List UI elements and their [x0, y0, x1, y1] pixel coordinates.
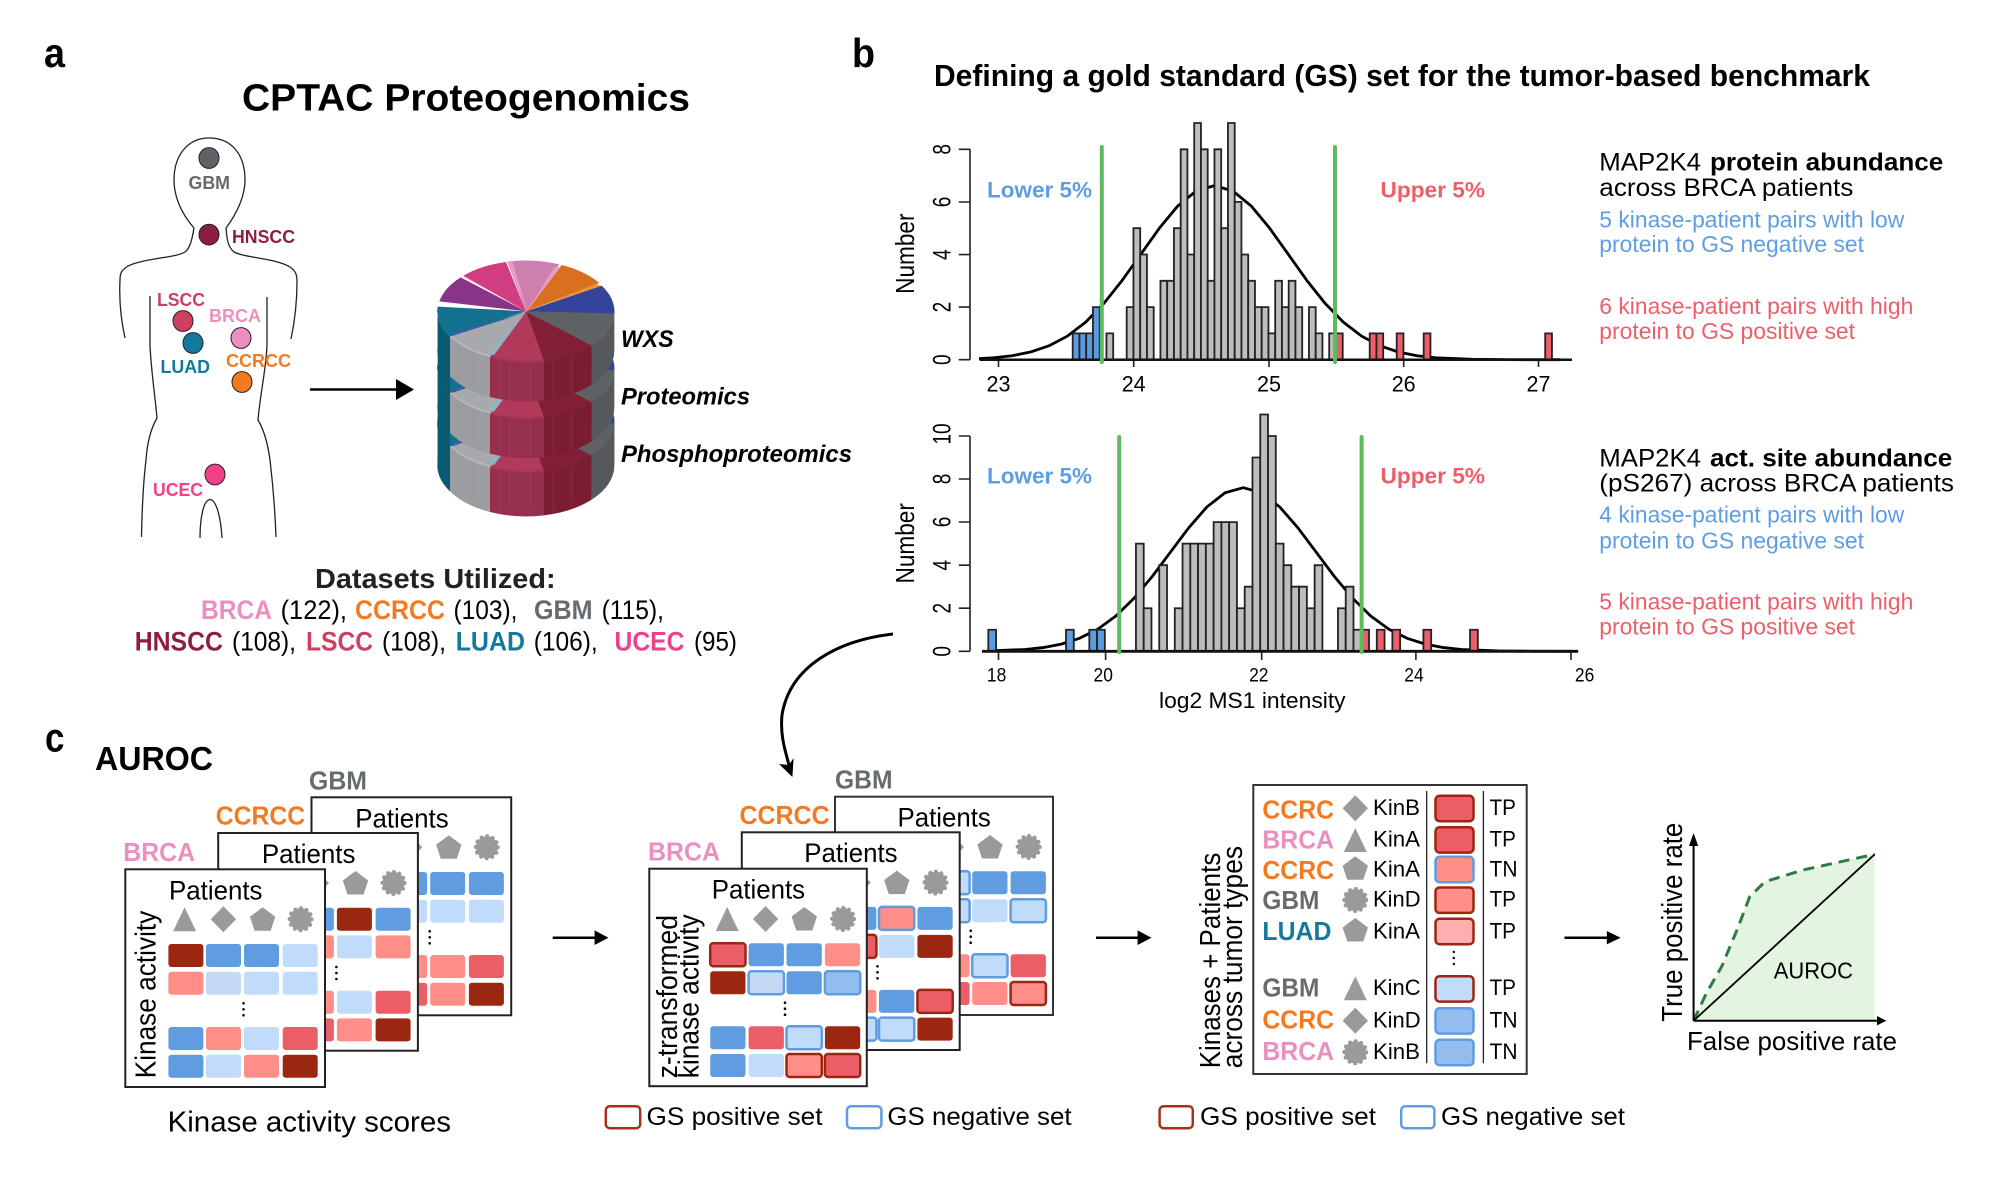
description: protein abundance: across BRCA patients	[1599, 174, 1853, 202]
histogram: activation site abundance	[892, 414, 1594, 713]
tumor type column: GBM	[1262, 885, 1319, 915]
kinase names column: KinA	[1373, 827, 1420, 852]
kinase names column: KinA	[1373, 918, 1420, 943]
datasets utilized text: (103),	[454, 595, 518, 625]
tumor label BRCA: BRCA	[123, 837, 195, 867]
TP / TN column: TN	[1490, 857, 1518, 882]
normal curve top	[979, 186, 1560, 360]
TP / TN column: TN	[1490, 1007, 1518, 1032]
description: protein abundance	[1599, 148, 1943, 344]
ROC curve chart	[1657, 823, 1897, 1056]
ROC dashed curve	[1694, 854, 1875, 1021]
body outline	[120, 138, 297, 538]
TP / TN column: TP	[1490, 795, 1516, 820]
TP / TN column: TP	[1490, 827, 1516, 852]
datasets utilized text: Datasets Utilized:	[315, 563, 556, 594]
datasets utilized text: (108),	[382, 626, 446, 656]
description: protein abundance: protein to GS negative set	[1599, 231, 1865, 257]
y ticks and labels bottom: 8	[928, 474, 956, 484]
rotated label: kinases and patients: Kinases + Patients	[1195, 853, 1227, 1068]
x tick labels top: 24	[1122, 372, 1146, 397]
axes top	[959, 149, 1572, 367]
tumor type column	[1262, 794, 1334, 1066]
card stack: z-transformed kinase activity	[648, 765, 1053, 1086]
percentile lines top	[1102, 147, 1335, 362]
site: BRCA	[209, 305, 261, 348]
kinase names column: KinA	[1373, 857, 1420, 882]
data layer labels: WXS	[621, 326, 674, 353]
site: LUAD: LUAD	[160, 356, 210, 377]
datasets utilized text: LSCC	[306, 626, 373, 656]
axes bottom	[959, 436, 1571, 660]
card CCRCC z-scores: Patients	[804, 838, 898, 868]
x axis title: log2 MS1 intensity	[1159, 688, 1346, 713]
card CCRCC	[218, 833, 418, 1051]
card BRCA: Kinase activity	[131, 910, 163, 1078]
rotated label: kinases and patients	[1195, 846, 1249, 1068]
legend: GS sets, middle: GS negative set	[887, 1103, 1072, 1131]
description: protein abundance: 6 kinase-patient pairs with high	[1599, 293, 1913, 319]
description: protein abundance: protein abundance	[1710, 148, 1943, 176]
site: LSCC	[157, 289, 205, 331]
tumor label CCRCC: CCRCC	[740, 800, 830, 830]
panel a title: CPTAC Proteogenomics	[242, 78, 690, 120]
legend: GS sets, middle: GS positive set	[646, 1103, 823, 1131]
site: HNSCC	[199, 224, 295, 247]
kinase names column: KinB	[1373, 1039, 1420, 1064]
lower and upper labels bottom: Upper 5%	[1380, 463, 1485, 488]
datasets utilized text: (95)	[694, 626, 737, 656]
TP / TN column	[1490, 795, 1518, 1064]
rotated label: kinases and patients: across tumor types	[1217, 846, 1249, 1068]
description: activation site abundance: 4 kinase-patient pairs with low	[1599, 502, 1905, 528]
site: BRCA: BRCA	[209, 305, 261, 326]
x tick labels bottom: 20	[1094, 666, 1113, 687]
kinase names column: KinD	[1373, 887, 1421, 912]
panel label a: a	[44, 30, 66, 76]
histogram bars bottom	[988, 414, 1478, 651]
datasets utilized text: (108),	[232, 626, 296, 656]
ranked table panel	[1253, 785, 1527, 1074]
datasets utilized text: CCRCC	[355, 595, 445, 625]
datasets utilized text: LUAD	[456, 626, 525, 656]
percentile lines bottom	[1119, 437, 1362, 652]
tumor label BRCA: BRCA	[648, 836, 720, 866]
site: GBM: GBM	[188, 172, 230, 193]
lower and upper labels top: Upper 5%	[1380, 178, 1485, 203]
x tick labels top: 23	[986, 372, 1010, 397]
tumor type column: CCRC	[1262, 1004, 1334, 1034]
diagonal reference line	[1694, 854, 1875, 1021]
body diagram with tumor sites	[120, 138, 297, 538]
x tick labels top	[986, 372, 1550, 397]
card CCRCC: Patients	[262, 839, 355, 869]
y ticks and labels bottom: 0	[928, 646, 956, 657]
kinase names column: KinD	[1373, 1007, 1421, 1032]
x tick labels top: 27	[1526, 372, 1550, 397]
y axis label: True positive rate	[1657, 823, 1689, 1022]
site: UCEC	[153, 464, 225, 500]
y ticks and labels bottom: 10	[928, 423, 956, 445]
y ticks and labels top: 6	[928, 197, 956, 207]
TP / TN column: TP	[1490, 887, 1516, 912]
description: activation site abundance: (pS267) across BRCA patients	[1599, 470, 1954, 498]
tumor type column: CCRC	[1262, 855, 1334, 885]
arrow: scores to z-transformed	[553, 930, 608, 945]
site: LUAD	[160, 333, 210, 377]
lower and upper labels bottom	[987, 463, 1485, 488]
legend: GS sets, right: GS positive set	[1200, 1103, 1376, 1131]
ROC axes	[1689, 833, 1886, 1025]
tumor label GBM: GBM	[309, 765, 367, 795]
data stack cylinder	[437, 261, 614, 516]
histogram bars top	[1073, 123, 1552, 360]
description: protein abundance: 5 kinase-patient pairs with low	[1599, 206, 1905, 232]
TP / TN column: TP	[1490, 975, 1516, 1000]
y ticks and labels bottom: 4	[928, 560, 956, 570]
data layer labels: Proteomics	[621, 384, 750, 411]
datasets utilized text: (115),	[602, 595, 664, 625]
site: CCRCC	[226, 350, 291, 392]
y ticks and labels top: Number	[892, 214, 920, 294]
site: GBM	[188, 148, 230, 193]
panel b title: Defining a gold standard (GS) set for the tumor-based benchmark	[934, 59, 1870, 93]
card GBM z-scores	[835, 797, 1053, 1015]
panel label b: b	[852, 30, 875, 76]
y ticks and labels bottom: Number	[892, 503, 920, 583]
arrow: z-transformed to ranked table	[1096, 930, 1152, 945]
card BRCA	[125, 869, 325, 1087]
AUROC label: AUROC	[1774, 957, 1853, 983]
tumor type column: LUAD	[1262, 916, 1331, 946]
site: CCRCC: CCRCC	[226, 350, 291, 371]
data layer labels: Phosphoproteomics	[621, 441, 852, 468]
panel label c: c	[45, 715, 64, 761]
AUROC area	[1694, 854, 1875, 1021]
data layer labels	[621, 326, 852, 468]
y ticks and labels top: 8	[928, 144, 956, 155]
card GBM: Patients	[355, 803, 449, 833]
tumor label GBM: GBM	[835, 765, 892, 795]
patient shape icons column	[1343, 795, 1368, 1063]
datasets utilized text: HNSCC	[135, 626, 223, 656]
curved arrow: histogram to z-transformed cards	[779, 634, 893, 777]
x tick labels top: 26	[1392, 372, 1416, 397]
card BRCA z-scores: z-transformed	[652, 915, 684, 1078]
y ticks and labels top: 2	[928, 302, 956, 312]
caption: kinase activity scores: Kinase activity scores	[168, 1107, 451, 1139]
kinase names column: KinB	[1373, 795, 1420, 820]
y ticks and labels top	[892, 144, 956, 365]
legend: GS sets, middle	[606, 1103, 1072, 1131]
TP / TN column: TP	[1490, 918, 1516, 943]
x tick labels bottom	[987, 666, 1594, 687]
card GBM z-scores: Patients	[898, 802, 991, 832]
tumor type column: GBM	[1262, 973, 1319, 1003]
histogram: protein abundance	[892, 123, 1572, 397]
lower and upper labels bottom: Lower 5%	[987, 463, 1092, 488]
card CCRCC z-scores	[742, 832, 960, 1050]
lower and upper labels top	[987, 178, 1485, 203]
tumor type column: BRCA	[1262, 824, 1334, 854]
site: UCEC: UCEC	[153, 479, 203, 500]
x tick labels bottom: 26	[1575, 666, 1594, 687]
tumor label CCRCC: CCRCC	[216, 801, 305, 831]
tumor type column: CCRC	[1262, 794, 1334, 824]
card BRCA z-scores: Patients	[712, 874, 805, 904]
legend: GS sets, right	[1160, 1103, 1625, 1131]
site: HNSCC: HNSCC	[232, 226, 295, 247]
description: protein abundance: protein to GS positive set	[1599, 318, 1856, 344]
y ticks and labels bottom	[892, 423, 956, 657]
x tick labels bottom: 24	[1404, 666, 1424, 687]
x tick labels bottom: 18	[987, 666, 1006, 687]
tumor type column: BRCA	[1262, 1036, 1334, 1066]
description: activation site abundance	[1599, 444, 1954, 640]
datasets utilized text: BRCA	[201, 595, 272, 625]
normal curve bottom	[989, 488, 1578, 651]
TP / TN column: TN	[1490, 1039, 1518, 1064]
card GBM	[312, 797, 511, 1015]
card stack: kinase activity scores	[123, 765, 511, 1087]
arrow: body to data stack	[310, 379, 414, 400]
arrow: table to ROC curve	[1564, 931, 1621, 944]
x tick labels bottom: 22	[1249, 666, 1269, 687]
description: activation site abundance: 5 kinase-patient pairs with high	[1599, 588, 1913, 614]
y ticks and labels bottom: 2	[928, 603, 956, 613]
datasets utilized text: (122),	[281, 595, 347, 625]
datasets utilized text: (106),	[534, 626, 598, 656]
description: activation site abundance: MAP2K4	[1599, 444, 1701, 472]
y ticks and labels top: 0	[928, 354, 956, 365]
score cells column	[1436, 796, 1474, 1065]
datasets utilized text	[135, 563, 737, 656]
description: activation site abundance: act. site abundance	[1710, 444, 1952, 472]
card BRCA z-scores	[649, 869, 867, 1086]
datasets utilized text: UCEC	[614, 626, 684, 656]
card BRCA: Patients	[169, 875, 263, 905]
legend: GS sets, right: GS negative set	[1441, 1103, 1625, 1131]
y ticks and labels bottom: 6	[928, 517, 956, 527]
lower and upper labels top: Lower 5%	[987, 178, 1092, 203]
x tick labels top: 25	[1257, 372, 1281, 397]
description: activation site abundance: protein to GS negative set	[1599, 527, 1865, 553]
kinase names column: KinC	[1373, 975, 1421, 1000]
description: protein abundance: MAP2K4	[1599, 148, 1701, 176]
datasets utilized text: GBM	[534, 595, 593, 625]
description: activation site abundance: protein to GS positive set	[1599, 614, 1856, 640]
card BRCA z-scores: kinase activity	[674, 914, 706, 1078]
x axis label: False positive rate	[1687, 1026, 1897, 1056]
y ticks and labels top: 4	[928, 249, 956, 260]
kinase names column	[1373, 795, 1421, 1064]
site: LSCC: LSCC	[157, 289, 205, 310]
panel c title: AUROC	[95, 740, 213, 777]
